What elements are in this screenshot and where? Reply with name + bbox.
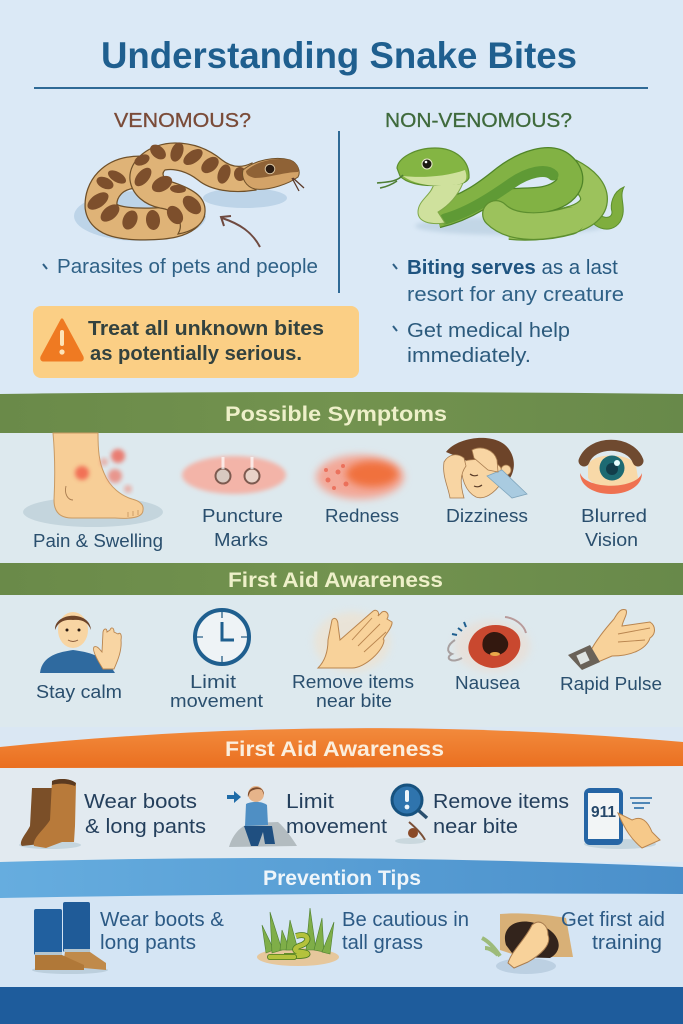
- label: limit movement: movement: [170, 690, 263, 711]
- text: remove items: [433, 790, 569, 838]
- icon: open hand: [314, 610, 392, 672]
- text: remove items: Remove items: [433, 790, 569, 813]
- text: parasites bullet: Parasites of pets and people: [57, 255, 318, 278]
- label: pain and swelling: Pain & Swelling: [33, 531, 163, 551]
- heading band: first aid awareness: First Aid Awareness: [228, 569, 443, 592]
- panel: non-venomous: [377, 110, 624, 367]
- icon: hand near burrow: [482, 913, 573, 974]
- text: wear boots: & long pants: [85, 815, 206, 838]
- text: warning message: as potentially serious.: [90, 342, 302, 365]
- label: redness: Redness: [325, 505, 399, 526]
- text: get first aid training: Get first aid: [561, 909, 665, 931]
- heading band: first aid awareness: [0, 563, 683, 595]
- icon: blue boots: [32, 902, 108, 974]
- text: be cautious: [342, 909, 469, 954]
- label: remove items near bite: near bite: [316, 690, 392, 711]
- label: puncture marks: Marks: [214, 529, 268, 550]
- label: nausea: Nausea: [455, 672, 521, 693]
- text: biting serves bullet: resort for any creature: [407, 283, 624, 306]
- heading band: first aid awareness: [0, 728, 683, 768]
- icon: snake in grass: [257, 908, 339, 966]
- panel: possible symptoms: [0, 392, 683, 563]
- text: medical help bullet: immediately.: [407, 344, 531, 367]
- text: get first aid training: training: [592, 932, 662, 954]
- heading band: first aid awareness: First Aid Awareness: [225, 738, 444, 761]
- text: biting serves bullet: [393, 256, 624, 306]
- icon: brown boots: [19, 779, 81, 849]
- label: rapid pulse: Rapid Pulse: [560, 673, 662, 694]
- icon: non-venomous snake: [377, 148, 624, 235]
- heading: venomous: VENOMOUS?: [114, 110, 251, 132]
- label: dizziness: Dizziness: [446, 505, 528, 526]
- icon: foot: [23, 433, 163, 527]
- divider: [338, 131, 340, 293]
- text: wear boots and long pants: [100, 909, 225, 954]
- heading band: prevention tips: [0, 858, 683, 898]
- icon: sitting person: [227, 786, 297, 847]
- icon: warning triangle: [42, 320, 82, 360]
- label: remove items near bite: [292, 671, 414, 711]
- icon: phone 911: 911: [591, 804, 616, 821]
- label: stay calm: Stay calm: [36, 681, 122, 702]
- heading: non-venomous: NON-VENOMOUS?: [385, 110, 572, 132]
- text: limit movement: movement: [286, 815, 387, 838]
- panel: first aid awareness orange: [0, 727, 683, 862]
- text: remove items: near bite: [433, 815, 518, 838]
- heading band: prevention tips: Prevention Tips: [263, 867, 421, 890]
- text: limit movement: [286, 790, 387, 838]
- label: blurred vision: Blurred: [581, 505, 647, 526]
- text: wear boots and long pants: long pants: [100, 932, 196, 954]
- text: get first aid training: [561, 909, 665, 954]
- text: wear boots: Wear boots: [84, 790, 197, 813]
- icon: magnifier: [392, 785, 427, 844]
- title: Understanding Snake Bites: [101, 35, 577, 76]
- icon: puncture marks: [182, 456, 286, 494]
- label: limit movement: Limit: [190, 671, 236, 692]
- icon: calm person: [40, 612, 121, 673]
- icon: dizziness: [444, 438, 527, 498]
- text: wear boots and long pants: Wear boots &: [100, 909, 225, 931]
- panel: venomous: [43, 110, 318, 278]
- callout: warning: [33, 306, 359, 378]
- icon: phone 911: [584, 788, 660, 849]
- label: remove items near bite: Remove items: [292, 671, 414, 692]
- text: wear boots: [84, 790, 206, 838]
- text: be cautious: tall grass: [342, 932, 423, 954]
- label: puncture marks: Puncture: [202, 505, 283, 526]
- icon: wrist pulse: [568, 609, 654, 670]
- panel: first aid awareness green: [0, 563, 683, 727]
- text: warning message: Treat all unknown bites: [88, 317, 324, 340]
- label: blurred vision: [581, 505, 647, 550]
- icon: redness: [316, 455, 404, 499]
- icon: venomous snake: [74, 141, 304, 241]
- text: warning message: [88, 317, 324, 365]
- footer band: [0, 987, 683, 1024]
- icon: clock: [195, 610, 249, 664]
- text: medical help bullet: Get medical help: [407, 319, 570, 342]
- text: medical help bullet: [393, 319, 570, 367]
- label: puncture marks: [202, 505, 283, 550]
- arrow: points to snake: [221, 216, 260, 247]
- label: limit movement: [170, 671, 263, 711]
- icon: nausea mouth: [448, 617, 530, 672]
- text: biting serves bullet: Biting serves as a last: [407, 256, 618, 279]
- panel: prevention tips: [0, 858, 683, 989]
- text: limit movement: Limit: [286, 790, 334, 813]
- heading band: possible symptoms: Possible Symptoms: [225, 403, 447, 426]
- label: blurred vision: Vision: [585, 529, 638, 550]
- text: be cautious: Be cautious in: [342, 909, 469, 931]
- icon: blurred vision eye: [580, 445, 642, 494]
- heading band: possible symptoms: [0, 392, 683, 433]
